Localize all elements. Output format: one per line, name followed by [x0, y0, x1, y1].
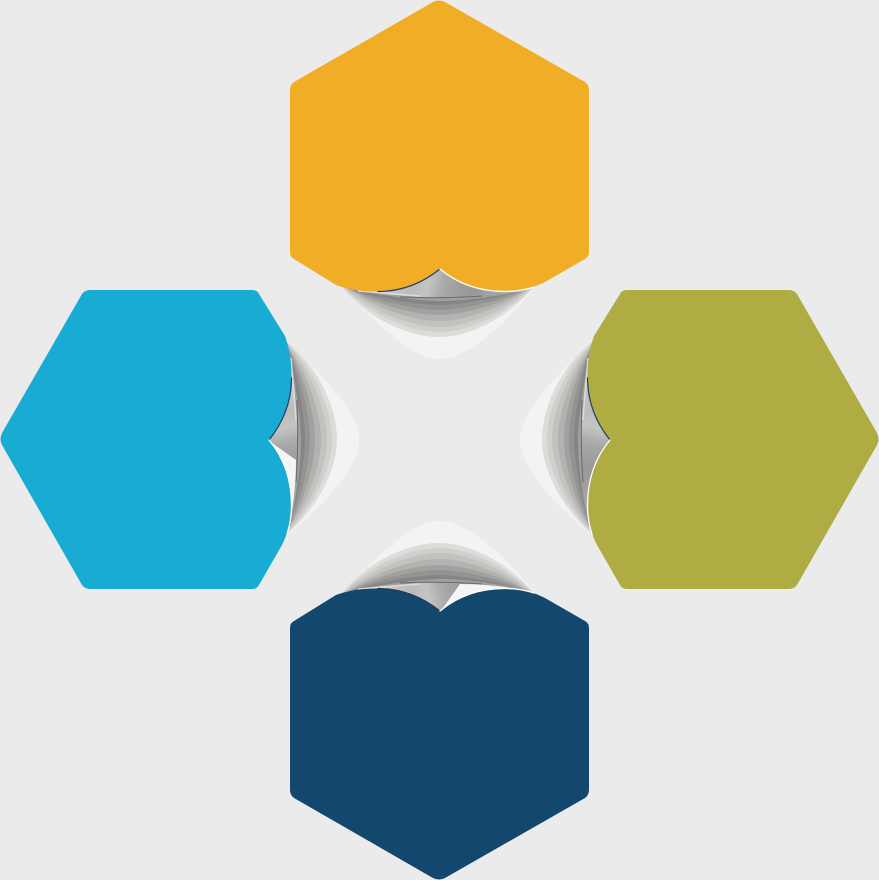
panel: top orange hexagon [290, 0, 589, 359]
edge highlight: left [269, 378, 292, 534]
curl shadow: right [520, 338, 617, 537]
curl shadow: top [338, 262, 537, 359]
white wedge: bottom [443, 584, 530, 608]
panel: right olive hexagon [520, 290, 878, 589]
panel: left blue hexagon [0, 290, 359, 589]
hexagon: olive [588, 290, 878, 589]
white wedge: left [272, 443, 296, 530]
edge highlight: bottom [378, 588, 534, 611]
edge highlight: top [378, 269, 534, 292]
edge highlight: right [588, 378, 610, 534]
hexagon: blue [0, 290, 292, 589]
panel: bottom navy hexagon [290, 521, 589, 880]
hexagon: orange [290, 0, 589, 292]
curl shadow: bottom [338, 521, 537, 618]
curl shadow: left [262, 338, 359, 537]
hexagon: navy [290, 588, 589, 880]
